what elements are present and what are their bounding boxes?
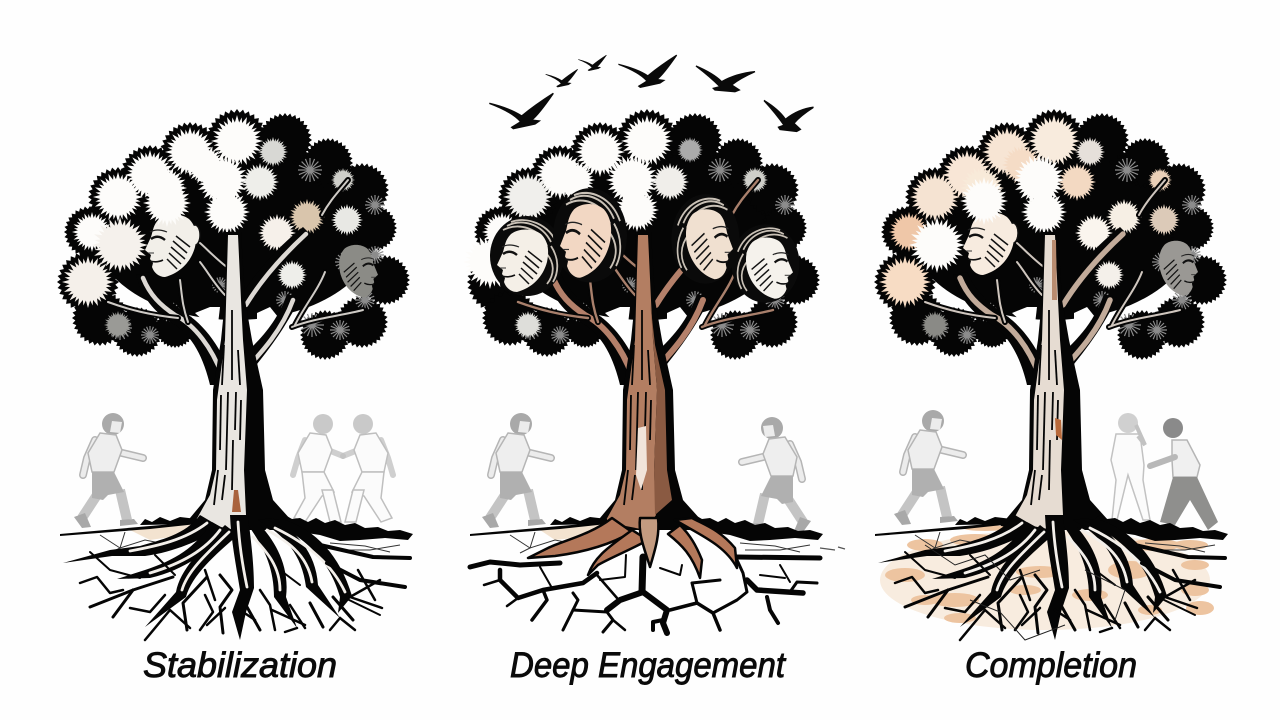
- face 1: [490, 216, 564, 296]
- person: faded standing figure: [1111, 413, 1150, 520]
- canopy: deep engagement: [461, 104, 824, 364]
- burst over forehead: [141, 177, 193, 229]
- face 3: [671, 194, 739, 284]
- label: Stabilization: Stabilization: [143, 646, 337, 685]
- soil: pale wash: [880, 530, 1210, 630]
- label: Completion: Completion: [965, 646, 1137, 685]
- person: walking left of trunk: [894, 410, 963, 525]
- face 4: [731, 224, 799, 303]
- soil and roots: stabilization: [60, 515, 413, 640]
- trunk and branches: stabilization: [108, 180, 363, 530]
- canopy: stabilization: [52, 104, 414, 364]
- people: faded pair shaking hands: [293, 414, 393, 522]
- person: walking left of trunk: [74, 413, 143, 528]
- person: walking right of trunk: [742, 417, 811, 532]
- person: walking left of trunk: [482, 413, 551, 528]
- soil patches: orange: [885, 525, 1214, 623]
- label: Deep Engagement: Deep Engagement: [510, 646, 786, 685]
- soil and roots: completion: [875, 515, 1228, 640]
- faces: four faces in canopy: [490, 188, 799, 303]
- face 2: [553, 188, 627, 283]
- soil, roots and cracks: deep engagement: [470, 515, 845, 633]
- panel: deep engagement tree: [461, 55, 845, 685]
- trunk and branches: deep engagement: [518, 180, 773, 530]
- canopy: completion: [869, 104, 1231, 364]
- face: left, facing left: [963, 212, 1018, 275]
- face: left, facing left: [145, 214, 200, 277]
- face: right, fading grey: [1159, 241, 1198, 296]
- trunk and branches: completion: [925, 180, 1180, 530]
- birds: [489, 55, 813, 131]
- person: bending figure with grey trousers: [1150, 418, 1218, 530]
- panel: stabilization tree: [52, 104, 414, 685]
- burst over forehead: [958, 175, 1010, 227]
- face: right, fading grey: [339, 245, 378, 297]
- panel: completion tree: [869, 104, 1231, 685]
